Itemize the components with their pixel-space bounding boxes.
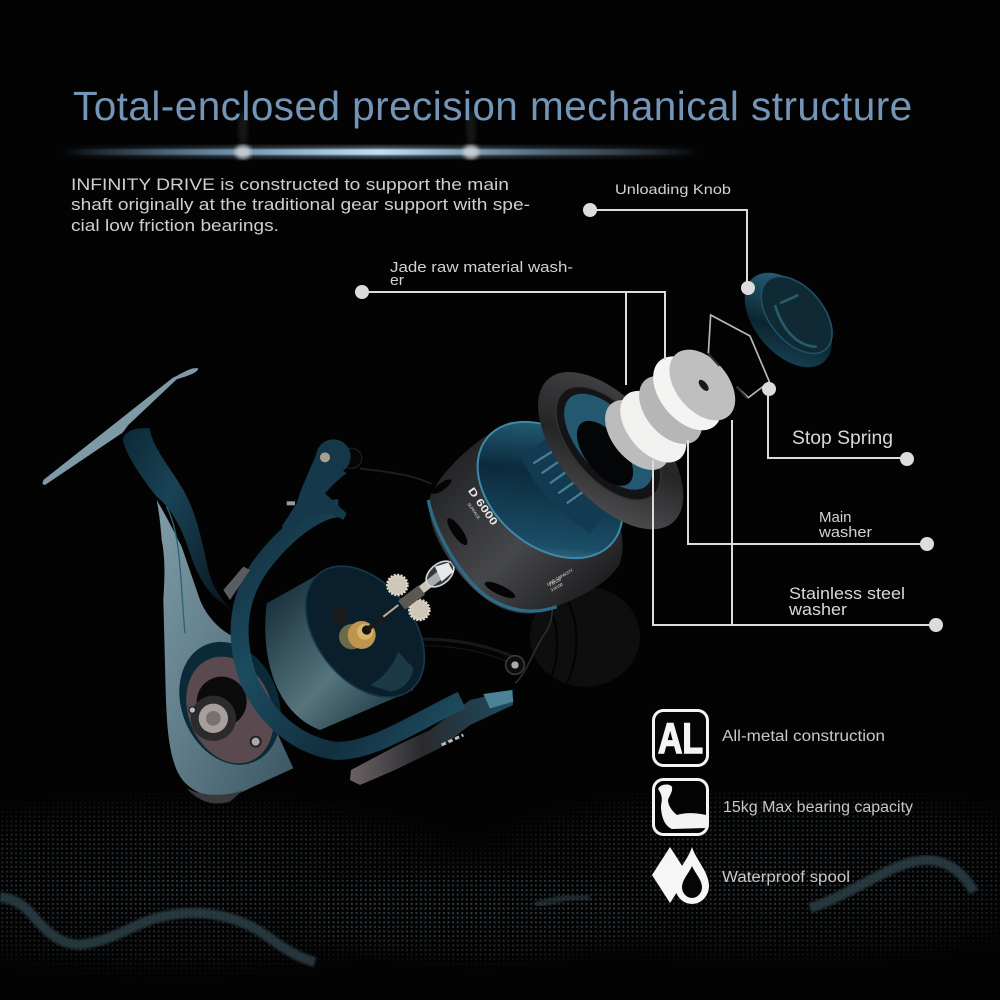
feature text: waterproof spool: Waterproof spool <box>722 869 850 886</box>
label: jade raw material washer: er <box>390 273 404 289</box>
gears <box>387 556 459 620</box>
dark stem highlight <box>123 428 230 610</box>
callout lines <box>362 210 936 625</box>
skirt slots <box>430 477 517 601</box>
label: unloading knob: Unloading Knob <box>615 181 731 197</box>
intro text block: cial low friction bearings. <box>71 216 279 235</box>
spool labels: 2.5/120 <box>548 576 563 588</box>
label: main washer: washer <box>818 524 872 541</box>
label: jade raw material washer: Jade raw material wash- <box>390 260 573 276</box>
label: stainless steel washer: Stainless steel <box>789 584 905 603</box>
intro text block: shaft originally at the traditional gear support with spe- <box>71 195 530 214</box>
spool labels: 3.0/100 <box>550 581 564 593</box>
lens flare divider <box>60 110 700 159</box>
gold nut and pinion <box>330 605 398 649</box>
cup face <box>281 544 449 720</box>
reel foot <box>42 368 198 485</box>
handle foam grip <box>530 587 640 687</box>
feature text: all-metal construction: All-metal construction <box>722 728 885 745</box>
intro text block <box>71 175 530 235</box>
bottom roller <box>506 656 524 674</box>
lower reel body <box>157 500 293 798</box>
washer stack <box>592 337 748 482</box>
handle joint cap <box>483 690 513 708</box>
spool skirt <box>429 422 623 614</box>
label: jade raw material washer <box>390 260 573 289</box>
label: main washer: Main <box>819 509 852 526</box>
spool labels: SURFACE <box>466 502 482 520</box>
small screw <box>442 735 463 745</box>
reel body and rotor illustration <box>42 368 640 804</box>
label: main washer <box>818 509 872 541</box>
icon: aluminium: AL <box>658 715 703 763</box>
spool labels <box>465 485 574 593</box>
handle wires <box>360 468 552 683</box>
label: stainless steel washer <box>788 584 905 619</box>
icon: flexed arm <box>654 780 708 834</box>
spool disc <box>451 394 649 586</box>
intro text block: INFINITY DRIVE is constructed to support the main <box>71 175 509 194</box>
rotor ring arm <box>240 508 462 751</box>
exploded spool illustration <box>428 256 849 614</box>
side plate <box>161 627 299 780</box>
shaft housing cylinder <box>265 573 413 730</box>
spool labels: D 6000 <box>465 485 500 528</box>
rear arm piece <box>223 567 250 600</box>
title: Total-enclosed precision mechanical structure <box>73 83 913 129</box>
lower arm <box>350 690 513 785</box>
label: stop spring: Stop Spring <box>792 428 893 449</box>
label: stainless steel washer: washer <box>788 600 847 619</box>
bail arm and knob <box>282 439 362 532</box>
threaded arbor <box>522 438 613 533</box>
feature text: bearing capacity: 15kg Max bearing capacity <box>723 799 913 816</box>
callout dots <box>355 203 943 632</box>
bottom dark sole <box>187 788 243 804</box>
unloading knob <box>727 256 849 384</box>
stop spring <box>708 315 769 398</box>
spool flange <box>511 347 710 555</box>
icon: water drops <box>652 847 709 904</box>
spool labels: LINE CAPACITY <box>546 567 574 587</box>
dotted wave background <box>0 790 1000 990</box>
